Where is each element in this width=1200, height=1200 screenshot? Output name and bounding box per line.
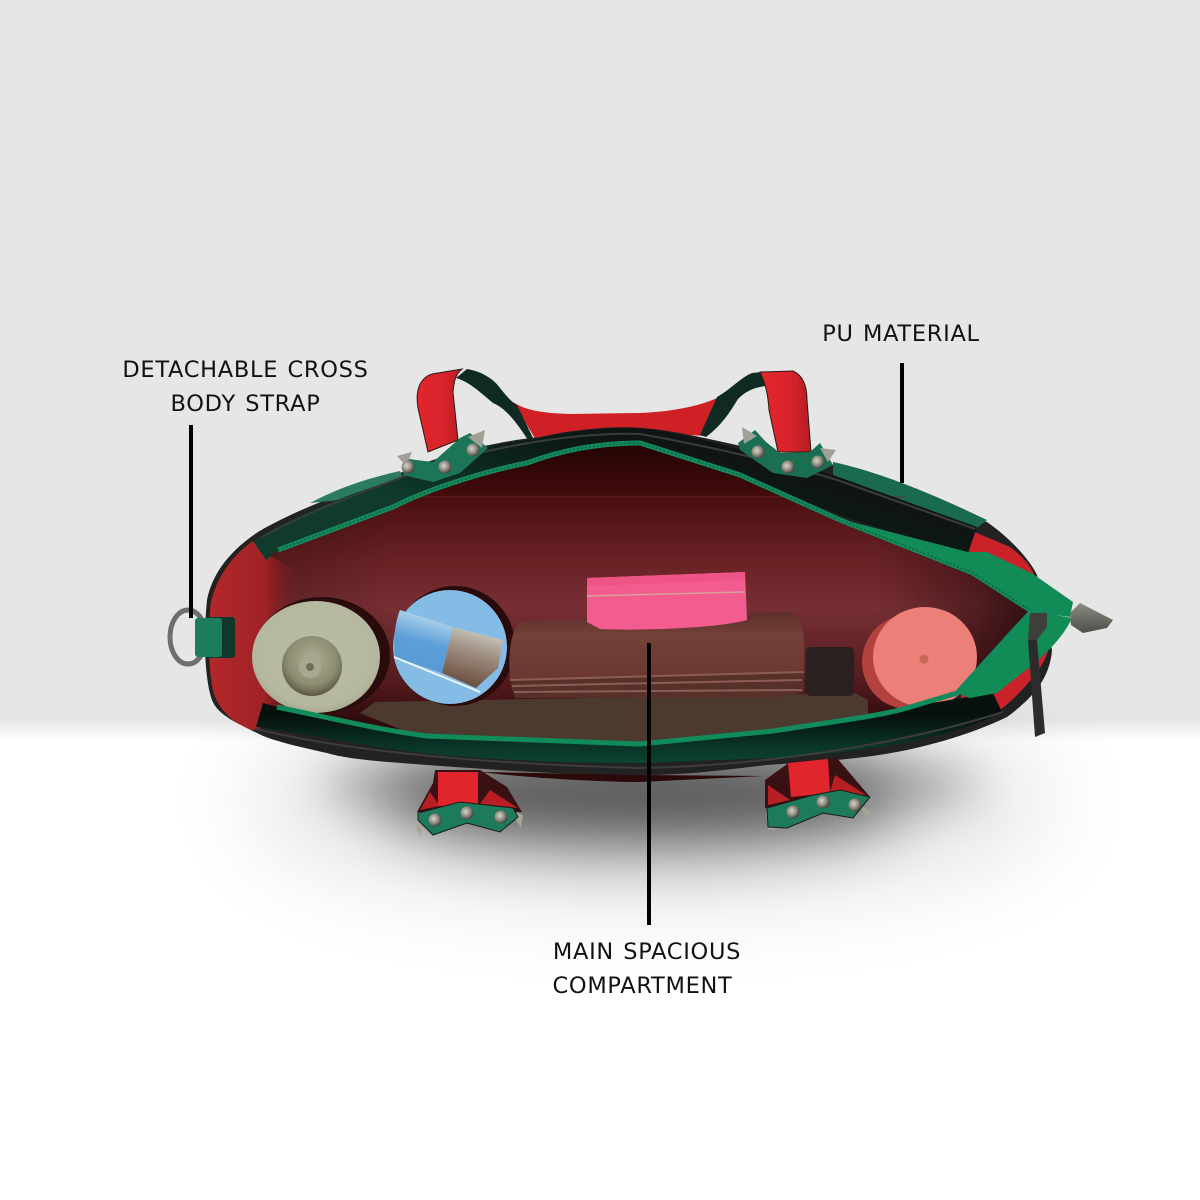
salmon bottle <box>862 607 977 709</box>
cardboard block <box>360 693 868 748</box>
green outer slivers <box>310 462 987 528</box>
interior side shading <box>262 443 1040 745</box>
bottom left foot <box>416 770 523 836</box>
label: PU material: PU MATERIAL <box>822 321 980 347</box>
top right studded tab <box>738 427 836 478</box>
back wall crease <box>395 496 905 498</box>
front lip <box>256 693 1002 763</box>
bag illustration <box>170 369 1113 836</box>
label: main spacious compartment: MAIN SPACIOUS <box>553 939 741 965</box>
leader line: main compartment <box>647 643 651 925</box>
bottom zipper and tape <box>277 610 1072 744</box>
top left studded tab <box>397 430 488 482</box>
label: main spacious compartment: COMPARTMENT <box>552 972 732 998</box>
top zipper <box>278 443 1073 617</box>
wallet <box>509 612 804 698</box>
small dark cube <box>806 647 854 696</box>
bottom right foot <box>765 758 872 830</box>
front rim lines <box>256 712 1003 768</box>
shadow under bag <box>250 705 1050 895</box>
top flap <box>253 428 977 560</box>
label: main spacious compartment <box>552 939 741 998</box>
label: detachable cross body strap: DETACHABLE CROSS <box>122 357 369 383</box>
ring and strap tab <box>170 610 235 664</box>
red inner walls <box>209 530 1048 730</box>
blue jar <box>393 586 515 706</box>
back handle strap <box>417 369 811 452</box>
label: detachable cross body strap <box>122 357 369 416</box>
label: detachable cross body strap: BODY STRAP <box>171 390 320 416</box>
interior lining <box>262 443 1040 745</box>
leader line: strap <box>189 425 193 618</box>
flap rim stitch <box>262 434 975 537</box>
left wall highlight <box>209 541 300 727</box>
pink box <box>587 572 747 630</box>
bottom underside <box>480 772 763 782</box>
bottle sage <box>252 597 390 713</box>
zipper puller and tag <box>1028 603 1113 737</box>
bag outer shell <box>205 427 1052 775</box>
leader line: PU material <box>900 363 904 483</box>
